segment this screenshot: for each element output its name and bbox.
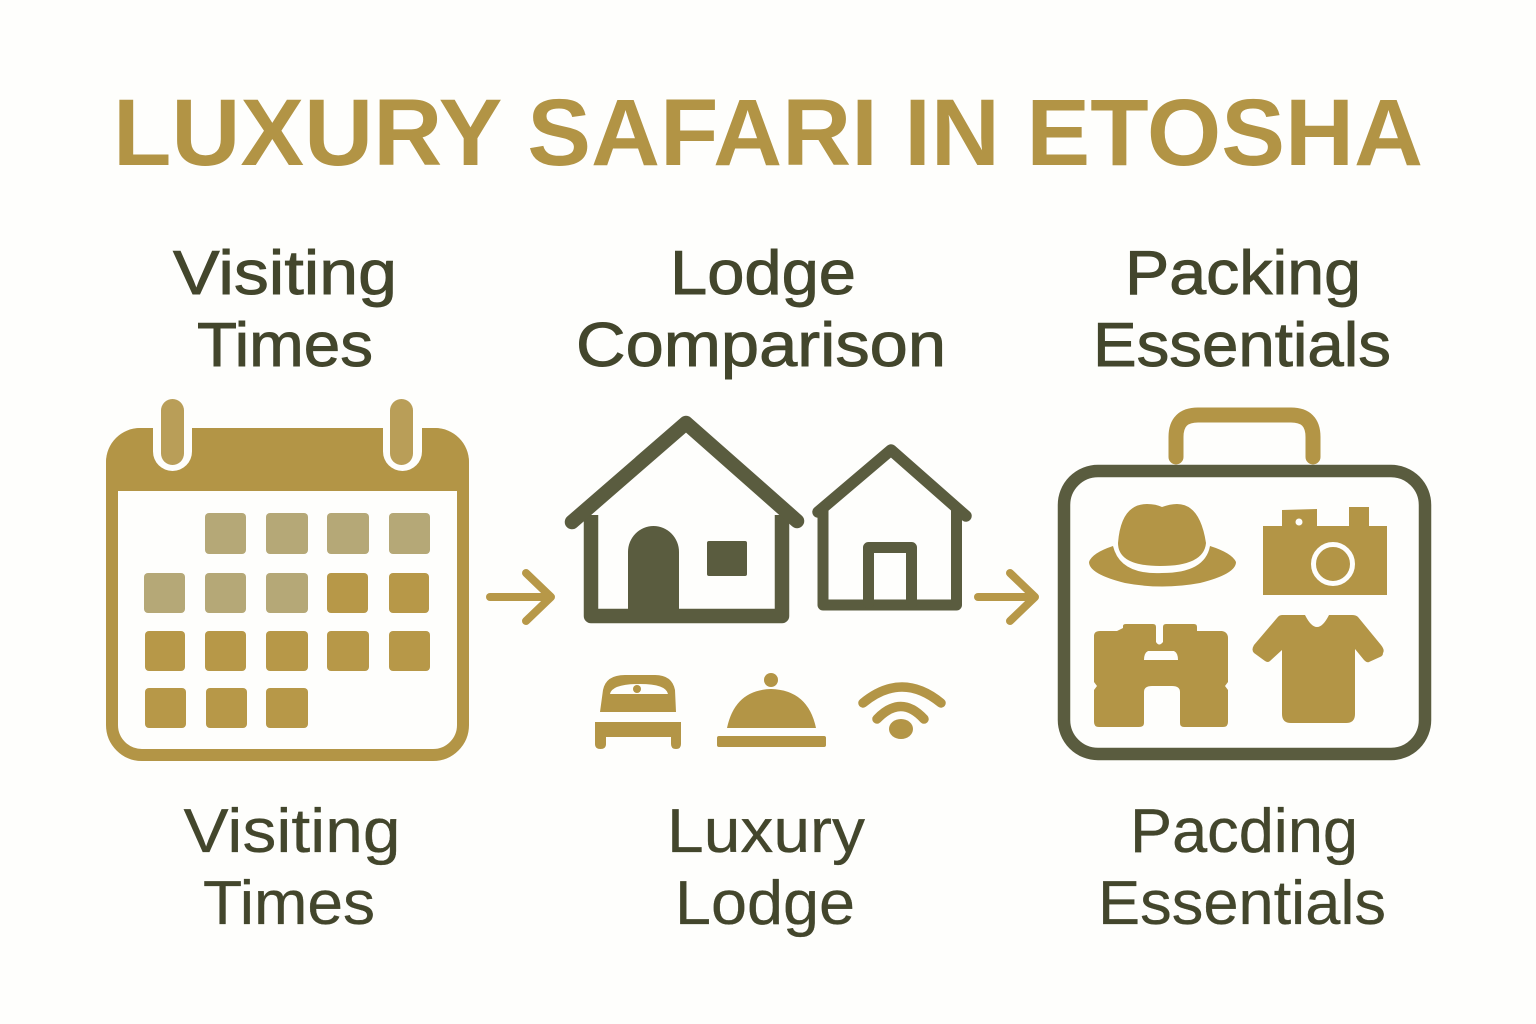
icon: camera [1263,507,1387,595]
icon: binoculars [1094,624,1228,727]
heading: visiting times: Times [197,311,373,380]
caption: visiting times: Times [203,869,375,938]
heading: lodge comparison [576,239,946,380]
caption: pacding essentials: Pacding [1130,797,1358,866]
caption: luxury lodge: Luxury [667,797,865,866]
title: LUXURY SAFARI IN ETOSHA [113,80,1423,186]
heading: packing essentials: Packing [1125,239,1361,308]
icon: large lodge [572,423,797,616]
caption: luxury lodge [667,797,865,938]
caption: pacding essentials [1098,797,1386,938]
icon: bed [595,675,681,749]
icon: wifi [863,687,941,739]
arrow: lodges to packing [978,573,1035,621]
caption: visiting times: Visiting [184,797,400,866]
icon: suitcase [1064,415,1425,754]
heading: lodge comparison: Comparison [576,311,946,380]
icon: hat [1089,504,1236,586]
icon: serving cloche [717,673,826,747]
caption: pacding essentials: Essentials [1098,869,1386,938]
icon: calendar [106,392,469,755]
icon: t-shirt [1252,615,1384,723]
heading: packing essentials: Essentials [1093,311,1391,380]
heading: packing essentials [1093,239,1391,380]
heading: visiting times [173,239,397,380]
icon: small lodge [818,450,966,605]
heading: visiting times: Visiting [173,239,397,308]
caption: luxury lodge: Lodge [675,869,855,938]
heading: lodge comparison: Lodge [670,239,856,308]
caption: visiting times [184,797,400,938]
arrow: calendar to lodges [490,573,551,621]
